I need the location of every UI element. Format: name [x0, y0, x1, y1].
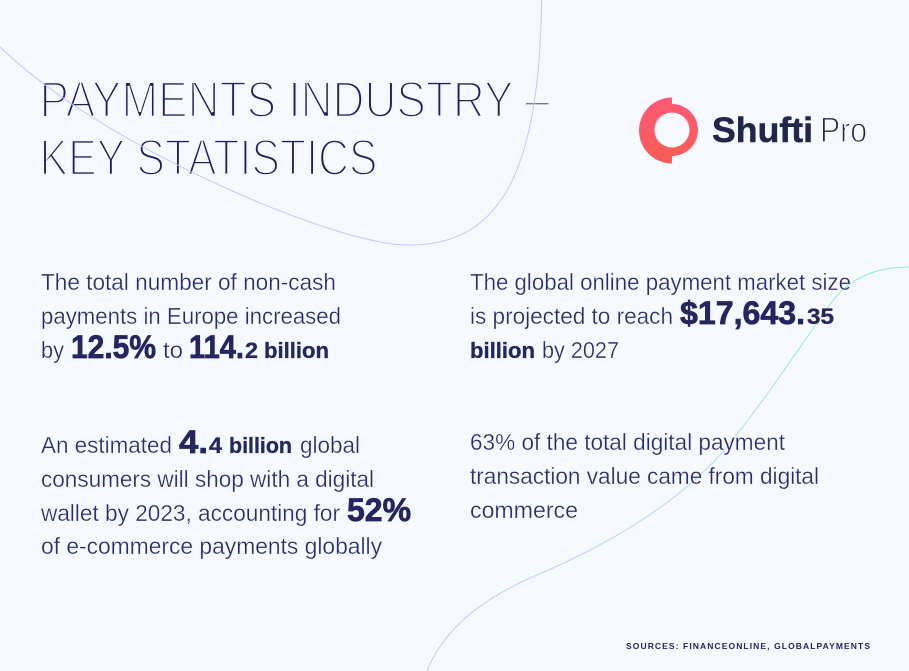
- stat: non-cash payments in Europe: by: [41, 337, 64, 363]
- stat: global online payment market: The global online payment market size: [470, 269, 851, 295]
- title: PAYMENTS INDUSTRY –: [40, 71, 550, 128]
- stat: non-cash payments in Europe: 2: [245, 338, 258, 363]
- stat: digital wallet consumers: An estimated: [41, 432, 172, 458]
- stat: non-cash payments in Europe: 12.5%: [71, 329, 156, 365]
- title: KEY STATISTICS: [40, 129, 378, 186]
- stat: global online payment market: is projected to reach: [470, 303, 673, 329]
- stat: global online payment market: billion: [470, 338, 535, 363]
- stat: global online payment market: $17,643.: [680, 295, 805, 331]
- stat: digital wallet consumers: [40, 424, 411, 559]
- stat: non-cash payments in Europe: billion: [264, 338, 329, 363]
- title: [40, 71, 550, 186]
- stat: global online payment market: 35: [807, 304, 834, 329]
- stat: digital wallet consumers: consumers will shop with a digital: [41, 466, 374, 492]
- stat: digital wallet consumers: of e-commerce payments globally: [41, 533, 382, 559]
- stat: digital commerce share: transaction value came from digital: [470, 463, 819, 489]
- stat: digital commerce share: commerce: [470, 497, 578, 523]
- icon: red ring: [639, 98, 698, 164]
- stat: digital wallet consumers: 52%: [347, 492, 411, 528]
- wordmark: Shufti: [712, 111, 813, 150]
- wordmark: [712, 111, 867, 150]
- stat: digital wallet consumers: global: [300, 432, 360, 458]
- stat: digital wallet consumers: wallet by 2023, accounting for: [40, 500, 340, 526]
- wordmark: Pro: [820, 111, 867, 150]
- sources note: SOURCES: FINANCEONLINE, GLOBALPAYMENTS: [626, 641, 870, 651]
- stat: digital commerce share: [470, 429, 819, 523]
- logo: Shufti Pro: [639, 98, 867, 164]
- stat: digital wallet consumers: 4.: [179, 424, 208, 460]
- stat: non-cash payments in Europe: The total number of non-cash: [41, 269, 336, 295]
- stat: non-cash payments in Europe: to: [163, 337, 183, 363]
- stat: digital wallet consumers: 4: [209, 433, 223, 458]
- stat: digital commerce share: 63% of the total digital payment: [470, 429, 786, 455]
- stat: global online payment market: [470, 269, 851, 363]
- stat: non-cash payments in Europe: 114.: [189, 329, 244, 365]
- stat: digital wallet consumers: billion: [229, 433, 292, 458]
- stat: non-cash payments in Europe: [41, 269, 341, 365]
- stat: non-cash payments in Europe: payments in Europe increased: [41, 303, 341, 329]
- stat: global online payment market: by 2027: [542, 337, 619, 363]
